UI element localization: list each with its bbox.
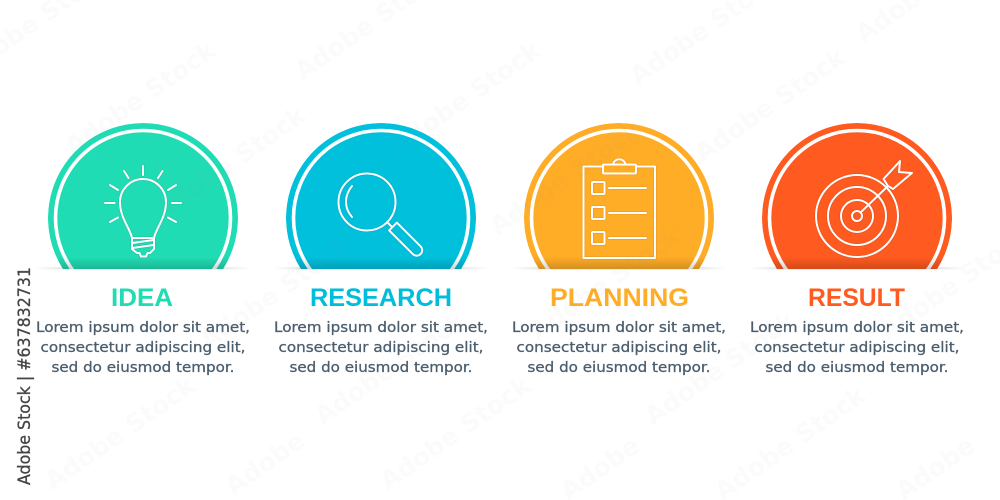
watermarks: Adobe Stock	[689, 42, 852, 168]
panel: result	[749, 123, 965, 376]
icon: light bulb	[105, 166, 181, 256]
text block: result: consectetur adipiscing elit,	[754, 340, 960, 356]
semicircle badge: result	[762, 123, 952, 269]
watermarks: Adobe	[220, 426, 310, 500]
stock id text: Adobe Stock | #637832731	[15, 267, 35, 485]
floor shadow: result	[749, 267, 965, 270]
floor shadow: research	[273, 267, 489, 270]
heading: planning: PLANNING	[550, 284, 689, 312]
watermarks: Adobe Stock	[39, 370, 202, 496]
text block: result: sed do eiusmod tempor.	[766, 360, 948, 376]
text block: result	[750, 320, 964, 376]
text block: idea	[36, 320, 250, 376]
heading: result: RESULT	[808, 284, 905, 312]
watermarks: Adobe Stock	[639, 305, 802, 431]
text block: research: consectetur adipiscing elit,	[278, 340, 484, 356]
watermarks: Adobe Stock	[524, 220, 687, 346]
semicircle badge: planning	[524, 123, 714, 269]
semicircle badge: research	[286, 123, 476, 269]
panel: research	[273, 123, 489, 376]
heading: research: RESEARCH	[310, 284, 452, 312]
watermarks: Adobe Stock	[484, 115, 647, 241]
watermarks: Adobe Stock	[59, 35, 222, 161]
watermarks: Adobe Stock	[149, 100, 312, 226]
floor shadow: idea	[35, 267, 251, 270]
watermarks: Adobe Stock	[309, 305, 472, 431]
semicircle badge: idea	[48, 123, 238, 269]
text block: research: sed do eiusmod tempor.	[290, 360, 472, 376]
text block: planning	[512, 320, 726, 376]
text block: planning: sed do eiusmod tempor.	[528, 360, 710, 376]
watermarks: Adobe Stock	[384, 35, 547, 161]
panel: idea	[35, 123, 251, 376]
floor shadow: planning	[511, 267, 727, 270]
icon: target with arrow	[816, 161, 912, 257]
watermarks: Adobe Stock	[374, 370, 537, 496]
text block: planning: Lorem ipsum dolor sit amet,	[512, 320, 726, 336]
icon: magnifying glass	[338, 174, 424, 258]
text block: idea: sed do eiusmod tempor.	[52, 360, 234, 376]
text block: result: Lorem ipsum dolor sit amet,	[750, 320, 964, 336]
icon: clipboard checklist	[584, 159, 655, 258]
panel: planning	[511, 123, 727, 376]
text block: research: Lorem ipsum dolor sit amet,	[274, 320, 488, 336]
text block: idea: Lorem ipsum dolor sit amet,	[36, 320, 250, 336]
text block: idea: consectetur adipiscing elit,	[40, 340, 246, 356]
heading: idea: IDEA	[111, 284, 173, 312]
text block: research	[274, 320, 488, 376]
watermarks: Adobe Stock	[194, 230, 357, 356]
text block: planning: consectetur adipiscing elit,	[516, 340, 722, 356]
